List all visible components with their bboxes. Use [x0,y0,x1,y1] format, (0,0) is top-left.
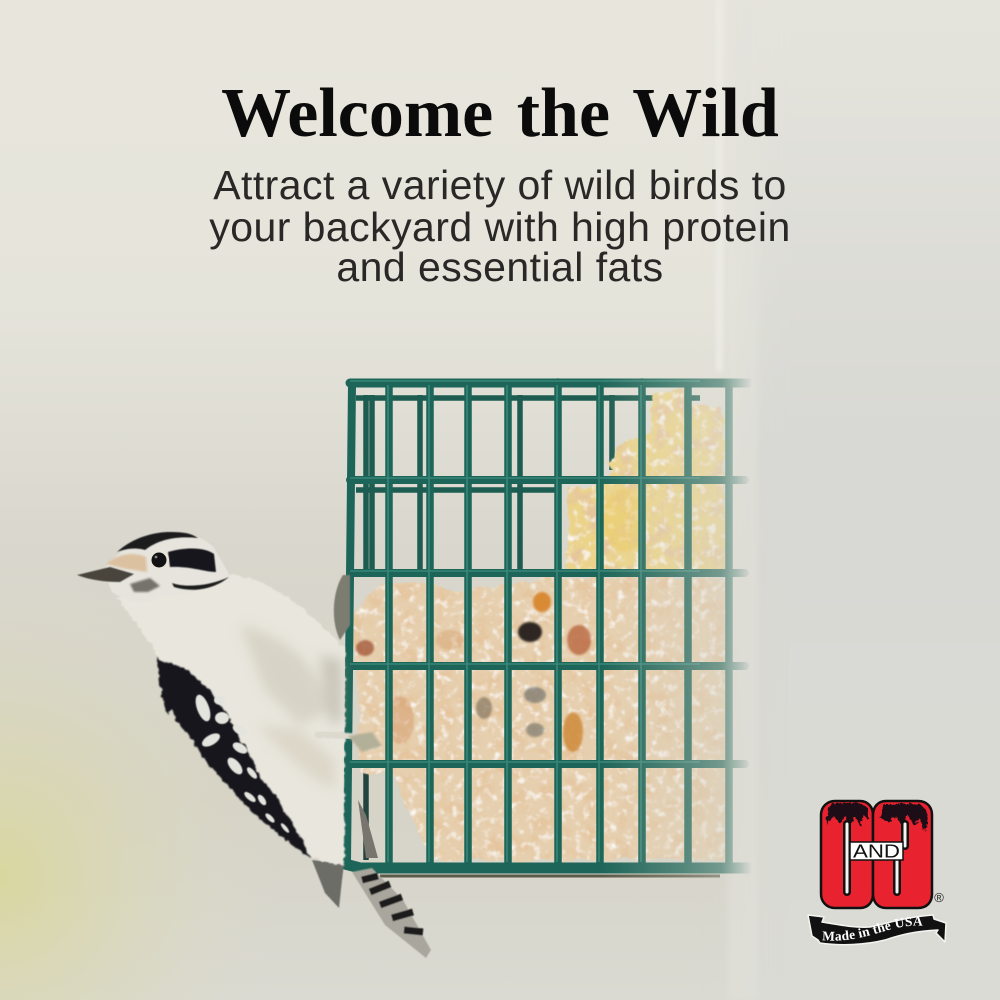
wire highlights [350,381,700,862]
ribbon [808,915,946,945]
registered mark: ® [934,890,944,905]
woodpecker [77,532,431,958]
subtitle: your backyard with high protein [209,204,791,250]
eye [149,550,169,570]
wing spots [193,693,290,834]
subtitle [209,162,791,290]
head [103,533,229,602]
wing [157,658,312,858]
toes on feeder [348,732,382,752]
ribbon text: Made in the USA [822,916,923,941]
foot gripping feeder [318,732,352,738]
feeder underside [380,874,720,878]
far leg [334,575,350,640]
beak [77,567,134,582]
letter C [821,801,873,908]
throat shadow [130,578,160,592]
letter slots [847,824,905,892]
subtitle: and essential fats [336,244,664,290]
eye stripe [168,548,216,572]
tail behind feeder [358,800,378,858]
feeder with suet cake [345,381,750,876]
buff face patch [106,554,147,572]
seed and nut pieces [356,488,647,752]
malar stripe [172,577,229,590]
body [117,574,345,866]
AND label: AND [853,842,900,862]
logo: C and S [807,800,947,946]
striped tail [352,868,431,958]
grey tail feather [312,860,344,908]
suet cake lower block [352,577,726,860]
letter S [873,801,932,908]
subtitle: Attract a variety of wild birds to [213,162,787,208]
feeder front grid [345,382,750,868]
body shading [240,625,342,790]
title: Welcome the Wild [221,75,779,152]
feeder back wires [356,395,700,860]
crown stripe [117,532,198,552]
scorched top of letters [826,803,928,832]
suet cake upper yellow block [566,390,726,574]
